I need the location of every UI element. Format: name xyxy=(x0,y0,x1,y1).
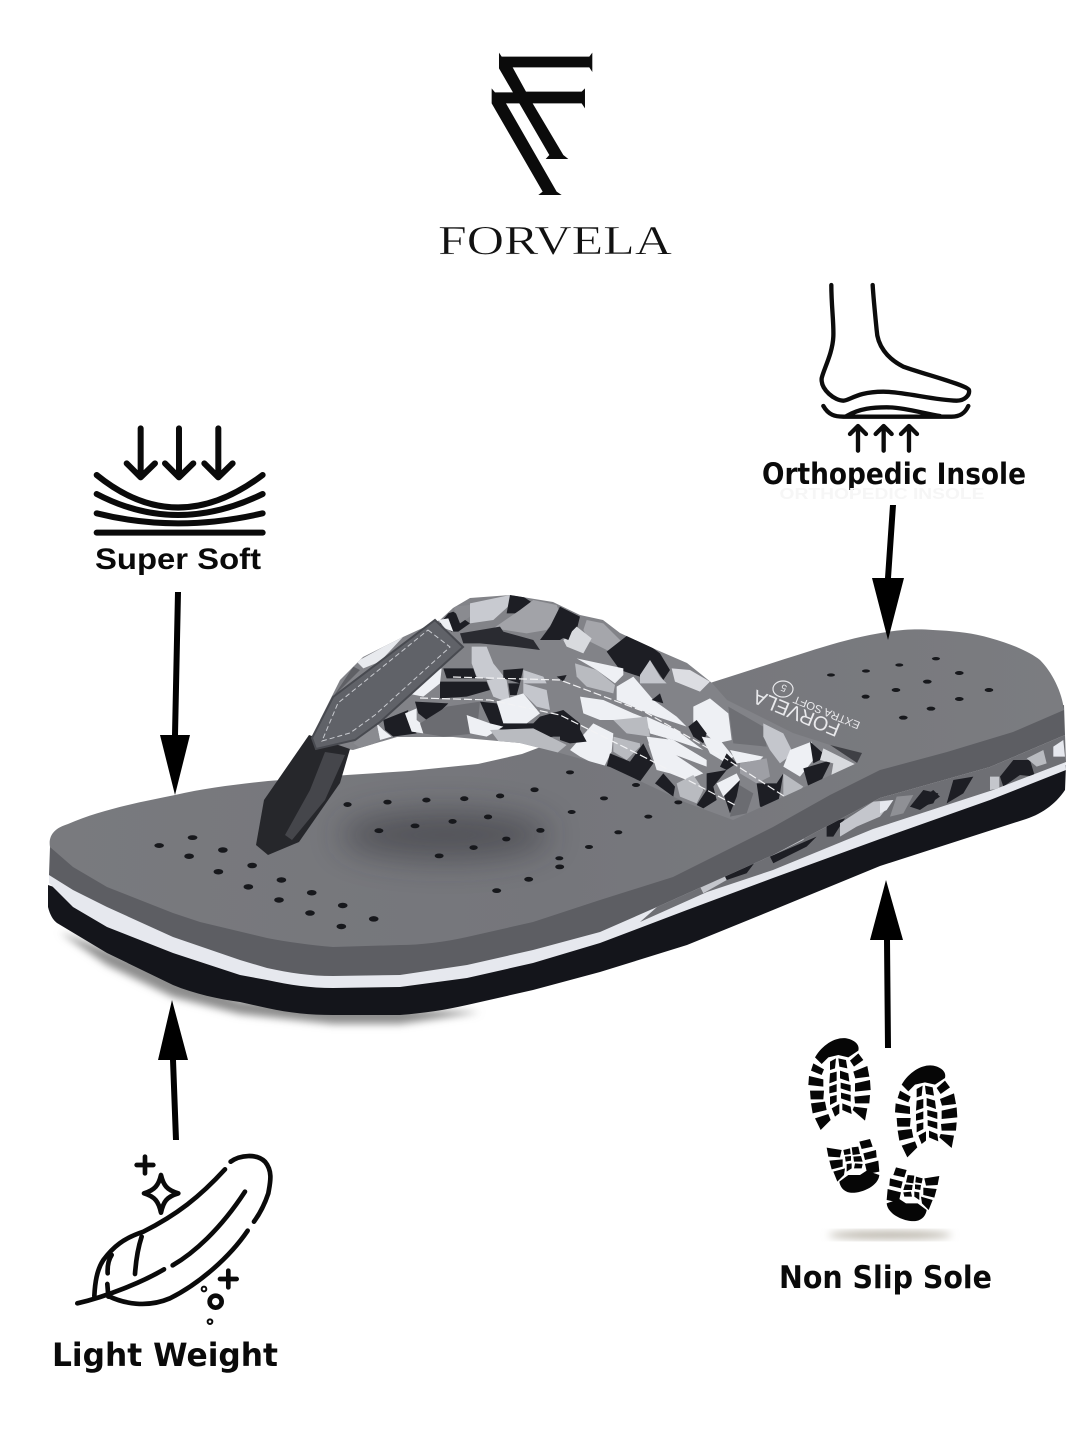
label: super soft: Super Soft xyxy=(95,543,261,576)
footbed top surface xyxy=(50,629,1064,947)
strap stitching xyxy=(453,677,790,800)
strap end notch xyxy=(830,745,862,763)
callout: orthopedic insole xyxy=(762,285,1026,640)
heel print: brand text: EXTRA SOFT xyxy=(791,693,862,731)
white stripe xyxy=(49,750,1066,988)
perforation holes xyxy=(154,657,993,929)
footbed shadow xyxy=(340,811,550,859)
camo midsole wedge xyxy=(640,735,1066,922)
right heel print xyxy=(887,1167,939,1221)
sole shadow xyxy=(60,932,480,1024)
right forefoot print xyxy=(895,1065,957,1157)
heel print: brand text: FORVELA xyxy=(749,685,843,740)
leather toe patch xyxy=(312,620,463,749)
icon: compression layers xyxy=(97,428,263,533)
black outsole xyxy=(48,765,1066,1015)
logo wordmark: FORVELA xyxy=(438,217,672,263)
arrow: up to outsole xyxy=(870,880,903,1048)
woven toe post xyxy=(256,735,350,855)
icon shadow xyxy=(828,1231,952,1239)
icon: feather xyxy=(77,1156,270,1323)
label: orthopedic insole: Orthopedic Insole xyxy=(762,457,1026,491)
camo strap xyxy=(320,595,857,820)
logo monogram xyxy=(492,53,592,195)
arrow: up to sole xyxy=(158,1000,188,1140)
arrow: down to footbed xyxy=(160,592,190,795)
callout: light weight xyxy=(52,1000,278,1374)
callout: super soft xyxy=(95,428,263,795)
icon: shoe prints xyxy=(808,1038,957,1221)
product: flip flop sandal xyxy=(48,580,1080,1024)
left heel print xyxy=(827,1139,879,1193)
icon: foot on insole xyxy=(822,285,969,451)
ghost reflection text: ORTHOPEDIC INSOLE xyxy=(780,486,985,503)
arrow: down to heel xyxy=(872,505,904,640)
brand logo xyxy=(438,53,672,263)
left forefoot print xyxy=(808,1038,871,1130)
heel print: brand text: 5 xyxy=(779,681,789,693)
label: non slip sole: Non Slip Sole xyxy=(779,1260,992,1296)
label: light weight: Light Weight xyxy=(52,1336,278,1374)
callout: non slip sole xyxy=(779,880,992,1296)
midsole side layer xyxy=(49,705,1065,976)
